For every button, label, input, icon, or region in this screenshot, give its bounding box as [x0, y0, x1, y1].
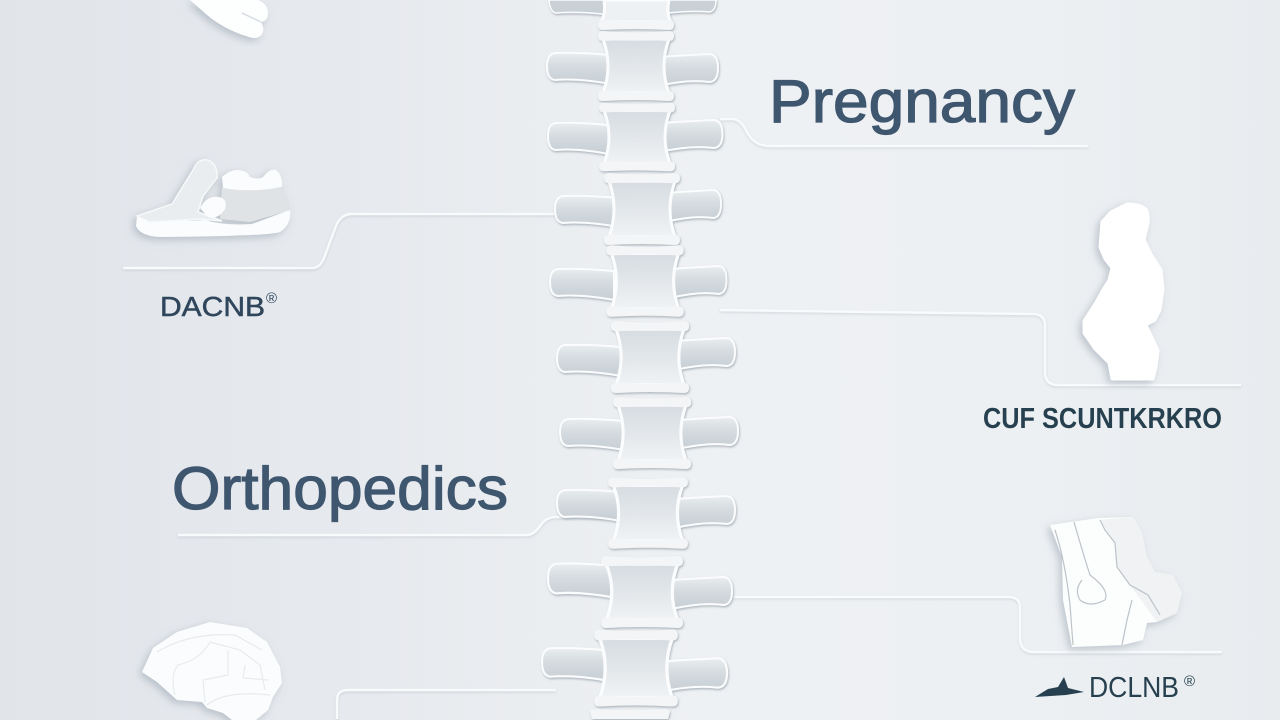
- icon: pregnant woman silhouette: [1084, 204, 1163, 379]
- vertebra 9: [542, 630, 727, 706]
- line: left lower connector: [337, 690, 556, 719]
- label: DACNB: ®: [266, 290, 277, 307]
- icon: brain: [142, 622, 282, 720]
- label: DCLNB: ®: [1184, 673, 1195, 690]
- knee crack and contour lines: [1055, 520, 1160, 645]
- spine: [542, 0, 738, 719]
- vertebra 8: [548, 556, 732, 628]
- heading: Pregnancy: Pregnancy: [769, 68, 1075, 135]
- label: DCLNB: [1035, 672, 1195, 704]
- label: DCLNB: DCLNB: [1089, 672, 1179, 704]
- shoe heel panel: [220, 188, 288, 222]
- shoe front and laces: [137, 160, 222, 222]
- vertebra 0: [549, 0, 716, 30]
- vertebra 1: [547, 31, 718, 101]
- icon: foot: [190, 0, 268, 38]
- vertebra 5: [557, 321, 735, 393]
- label: DACNB: DACNB: [160, 291, 265, 322]
- knee shaded region: [1100, 517, 1182, 622]
- connector lines: [123, 119, 1241, 719]
- icon: knee joint: [1050, 517, 1182, 647]
- shoe collar: [222, 170, 282, 190]
- icon: shoe: [136, 160, 290, 237]
- vertebra 10: [590, 709, 670, 719]
- vertebra 6: [560, 397, 738, 469]
- line: pregnancy connector: [720, 119, 1088, 146]
- heading: Orthopedics: Orthopedics: [172, 455, 508, 522]
- line: orthopedics connector: [178, 517, 606, 535]
- vertebra 4: [550, 245, 726, 317]
- vertebra 2: [548, 103, 722, 171]
- line: left upper connector: [123, 214, 560, 268]
- line: right lower connector: [733, 597, 1222, 652]
- shoe sole: [136, 210, 290, 237]
- icon: small landscape smudge: [1035, 677, 1084, 697]
- vertebra 3: [555, 173, 721, 245]
- label: garbled caption: CUF SCUNTKRKRO: [983, 403, 1222, 435]
- line: right middle connector: [720, 310, 1241, 385]
- vertebra 7: [557, 477, 735, 549]
